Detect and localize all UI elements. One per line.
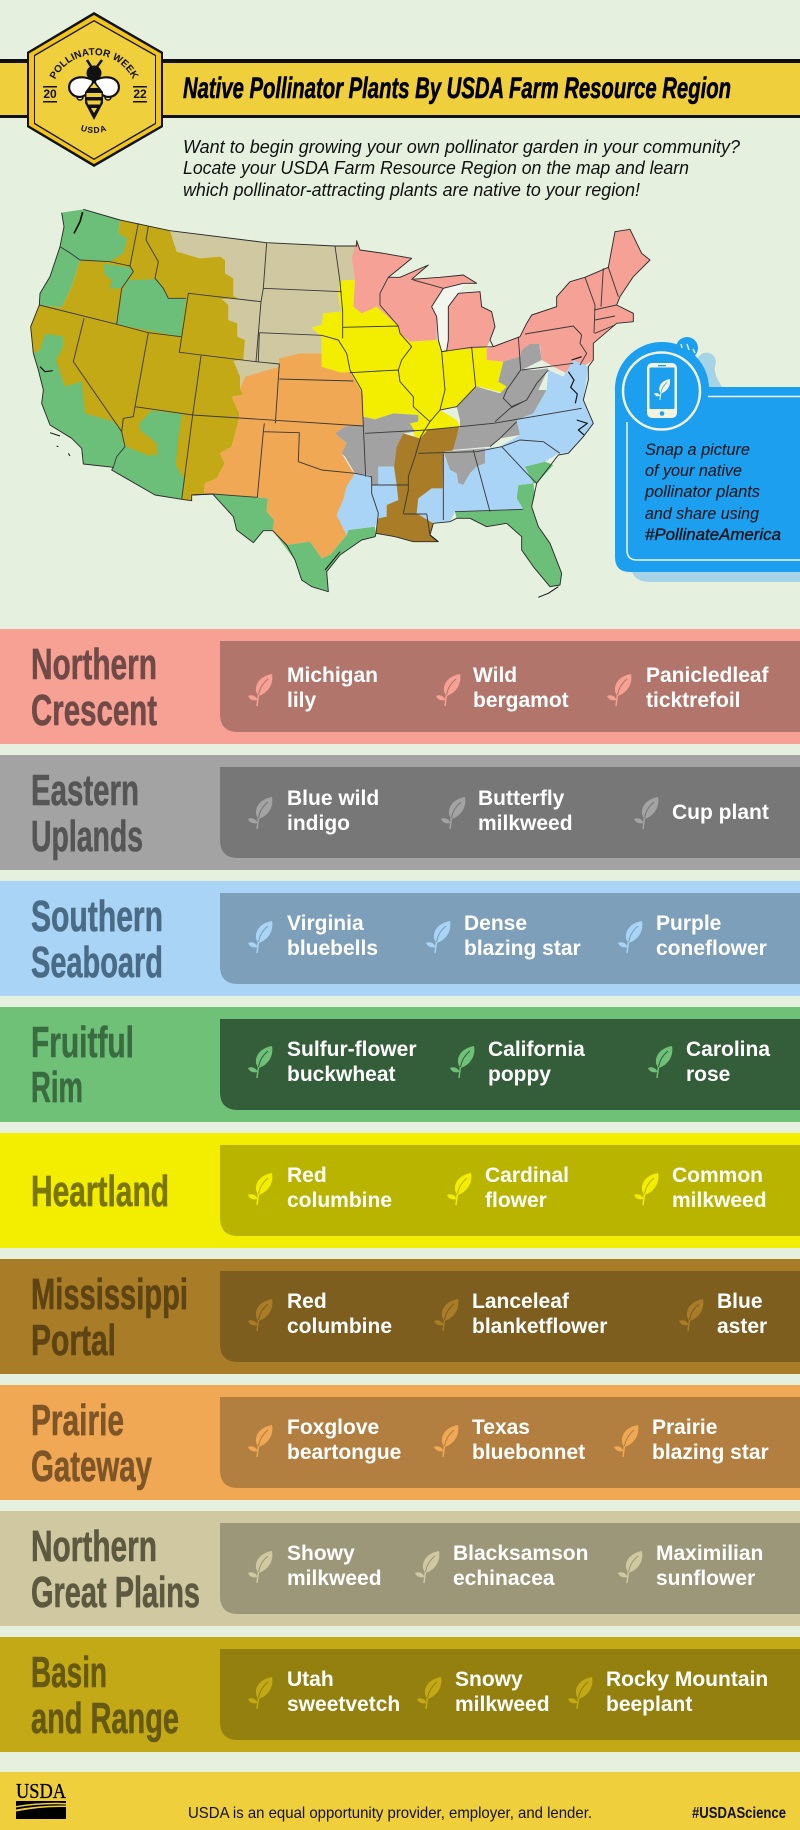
badge text: 22 — [133, 87, 147, 101]
callout shadow — [632, 353, 800, 582]
plants: Northern Great Plains: Showy — [287, 1542, 355, 1565]
plants: Basin and Range: milkweed — [455, 1693, 550, 1716]
footer statement: USDA is an equal opportunity provider, employer, and lender. — [188, 1805, 592, 1822]
plants: Prairie Gateway: beartongue — [287, 1441, 401, 1464]
plants: Eastern Uplands: milkweed — [478, 812, 573, 835]
plants: Eastern Uplands: Cup plant — [672, 801, 769, 824]
heading: Eastern Uplands — [31, 766, 143, 861]
callout text: pollinator plants — [644, 482, 760, 501]
icon: phone with leaf — [647, 363, 677, 418]
callout text: and share using — [645, 504, 760, 523]
callout text: of your native — [645, 461, 742, 480]
plants: Northern Great Plains: Blacksamson — [453, 1542, 588, 1565]
heading: Basin and Range: Basin — [31, 1648, 107, 1697]
callout text: Snap a picture — [645, 440, 750, 459]
plants: Fruitful Rim: rose — [686, 1063, 730, 1086]
plants: Heartland: Cardinal — [485, 1164, 569, 1187]
panel: Northern Great Plains — [0, 1511, 800, 1626]
plants: Fruitful Rim: California — [488, 1038, 585, 1061]
heading: Basin and Range — [31, 1648, 179, 1743]
plants: Eastern Uplands: Blue wild — [287, 787, 379, 810]
heading: Eastern Uplands: Eastern — [31, 766, 139, 815]
plants: Eastern Uplands: indigo — [287, 812, 350, 835]
heading: Eastern Uplands: Uplands — [31, 812, 143, 861]
plants: Southern Seaboard: blazing star — [464, 937, 581, 960]
heading: Mississippi Portal: Mississippi — [31, 1270, 188, 1319]
region: Basin and Range — [31, 220, 245, 501]
plants: Southern Seaboard — [248, 912, 767, 960]
panel: Northern Crescent — [0, 629, 800, 744]
intro text: Locate your USDA Farm Resource Region on the map and learn — [183, 158, 689, 178]
plants: Southern Seaboard: Purple — [656, 912, 721, 935]
region: Northern Crescent — [352, 229, 650, 373]
coastal inlets and islands — [40, 212, 587, 597]
region: Northern Great Plains — [170, 231, 357, 388]
intro text — [183, 137, 740, 200]
heading: Northern Crescent — [31, 640, 157, 735]
plants: Northern Crescent: bergamot — [473, 689, 569, 712]
region: Eastern Uplands — [335, 344, 548, 485]
panel: Southern Seaboard — [0, 881, 800, 996]
heading: Heartland: Heartland — [31, 1167, 169, 1216]
panel: Mississippi Portal — [0, 1259, 800, 1374]
heading: Northern Crescent: Northern — [31, 640, 157, 689]
plants: Southern Seaboard: Dense — [464, 912, 527, 935]
panel: Basin and Range — [0, 1637, 800, 1752]
coastline outline — [31, 209, 650, 592]
plants: Northern Great Plains: Maximilian — [656, 1542, 763, 1565]
plants: Fruitful Rim — [248, 1038, 770, 1086]
plants: Basin and Range: beeplant — [606, 1693, 692, 1716]
intro text: Want to begin growing your own pollinator garden in your community? — [183, 137, 740, 157]
plants: Southern Seaboard: Virginia — [287, 912, 364, 935]
logo: USDA: USDA — [16, 1779, 67, 1803]
plants: Eastern Uplands: Butterfly — [478, 787, 565, 810]
plants: Heartland — [248, 1164, 767, 1212]
heading: Fruitful Rim — [31, 1018, 134, 1112]
badge text: USDA — [81, 125, 106, 134]
plants: Heartland: columbine — [287, 1189, 392, 1212]
plants: Northern Crescent — [248, 664, 770, 712]
callout text: #PollinateAmerica — [645, 525, 781, 544]
heading: Fruitful Rim: Rim — [31, 1063, 83, 1112]
plants: Prairie Gateway: Texas — [472, 1416, 530, 1439]
Lake Michigan — [432, 283, 465, 352]
badge text: POLLINATOR WEEK — [49, 48, 139, 80]
plants: Fruitful Rim: Carolina — [686, 1038, 770, 1061]
plants: Northern Crescent: lily — [287, 689, 317, 712]
title banner — [0, 59, 800, 118]
state borders — [39, 223, 618, 535]
map of USDA farm resource regions — [31, 209, 650, 597]
plants: Basin and Range: Rocky Mountain — [606, 1668, 768, 1691]
heading: Mississippi Portal — [31, 1270, 188, 1365]
plants: Northern Crescent: Michigan — [287, 664, 378, 687]
plants: Prairie Gateway: Foxglove — [287, 1416, 379, 1439]
plants: Mississippi Portal: Red — [287, 1290, 327, 1313]
badge text: 20 — [43, 87, 57, 101]
plants: Heartland: flower — [485, 1189, 547, 1212]
region: Prairie Gateway — [204, 353, 363, 558]
callout text — [644, 440, 781, 544]
intro text: which pollinator-attracting plants are native to your region! — [183, 180, 640, 200]
badge: Pollinator Week 2022 — [27, 12, 163, 167]
heading: Northern Great Plains — [31, 1522, 200, 1617]
heading: Prairie Gateway: Prairie — [31, 1396, 124, 1445]
plants: Northern Crescent: Panicledleaf — [646, 664, 770, 687]
heading: Mississippi Portal: Portal — [31, 1316, 116, 1365]
panel: Fruitful Rim — [0, 1007, 800, 1122]
heading: Southern Seaboard: Seaboard — [31, 938, 163, 987]
plants: Mississippi Portal: columbine — [287, 1315, 392, 1338]
heading: Northern Crescent: Crescent — [31, 686, 157, 735]
footer — [0, 1772, 800, 1830]
plants: Prairie Gateway: bluebonnet — [472, 1441, 585, 1464]
region: Heartland — [312, 280, 507, 438]
region: Fruitful Rim — [33, 209, 562, 592]
icon: bee — [69, 60, 119, 120]
callout: share your picture — [615, 337, 800, 582]
logo: USDA — [16, 1779, 67, 1819]
plants: Mississippi Portal: Blue — [717, 1290, 763, 1313]
region: Mississippi Portal — [376, 427, 459, 542]
plants: Northern Crescent: Wild — [473, 664, 517, 687]
plants: Fruitful Rim: Sulfur-flower — [287, 1038, 416, 1061]
heading: Fruitful Rim: Fruitful — [31, 1018, 134, 1067]
badge text — [43, 48, 147, 134]
plants: Northern Great Plains — [248, 1542, 763, 1590]
plants: Heartland: milkweed — [672, 1189, 767, 1212]
plants: Southern Seaboard: bluebells — [287, 937, 378, 960]
plants: Mississippi Portal: blanketflower — [472, 1315, 607, 1338]
heading: Prairie Gateway — [31, 1396, 152, 1491]
plants: Heartland: Red — [287, 1164, 327, 1187]
heading: Northern Great Plains: Great Plains — [31, 1568, 200, 1617]
plants: Prairie Gateway: Prairie — [652, 1416, 717, 1439]
plants: Northern Crescent: ticktrefoil — [646, 689, 741, 712]
plants: Mississippi Portal: Lanceleaf — [472, 1290, 570, 1313]
plants: Fruitful Rim: buckwheat — [287, 1063, 396, 1086]
plants: Basin and Range: sweetvetch — [287, 1693, 400, 1716]
plants: Basin and Range — [248, 1668, 768, 1716]
panel: Prairie Gateway — [0, 1385, 800, 1500]
heading: Prairie Gateway: Gateway — [31, 1442, 152, 1491]
plants: Eastern Uplands — [248, 787, 769, 835]
heading: Southern Seaboard — [31, 892, 163, 987]
plants: Prairie Gateway: blazing star — [652, 1441, 769, 1464]
heading: Basin and Range: and Range — [31, 1694, 179, 1743]
plants: Southern Seaboard: coneflower — [656, 937, 767, 960]
plants: Mississippi Portal — [248, 1290, 767, 1338]
panel: Heartland — [0, 1133, 800, 1248]
heading: Northern Great Plains: Northern — [31, 1522, 157, 1571]
callout box — [615, 342, 800, 572]
plants: Northern Great Plains: milkweed — [287, 1567, 382, 1590]
plants: Northern Great Plains: sunflower — [656, 1567, 755, 1590]
plants: Northern Great Plains: echinacea — [453, 1567, 555, 1590]
plants: Prairie Gateway — [248, 1416, 769, 1464]
plants: Heartland: Common — [672, 1164, 763, 1187]
plants: Basin and Range: Snowy — [455, 1668, 523, 1691]
plants: Basin and Range: Utah — [287, 1668, 334, 1691]
plants: Fruitful Rim: poppy — [488, 1063, 551, 1086]
region: Southern Seaboard — [337, 360, 593, 535]
heading: Southern Seaboard: Southern — [31, 892, 163, 941]
panel: Eastern Uplands — [0, 755, 800, 870]
plants: Mississippi Portal: aster — [717, 1315, 767, 1338]
